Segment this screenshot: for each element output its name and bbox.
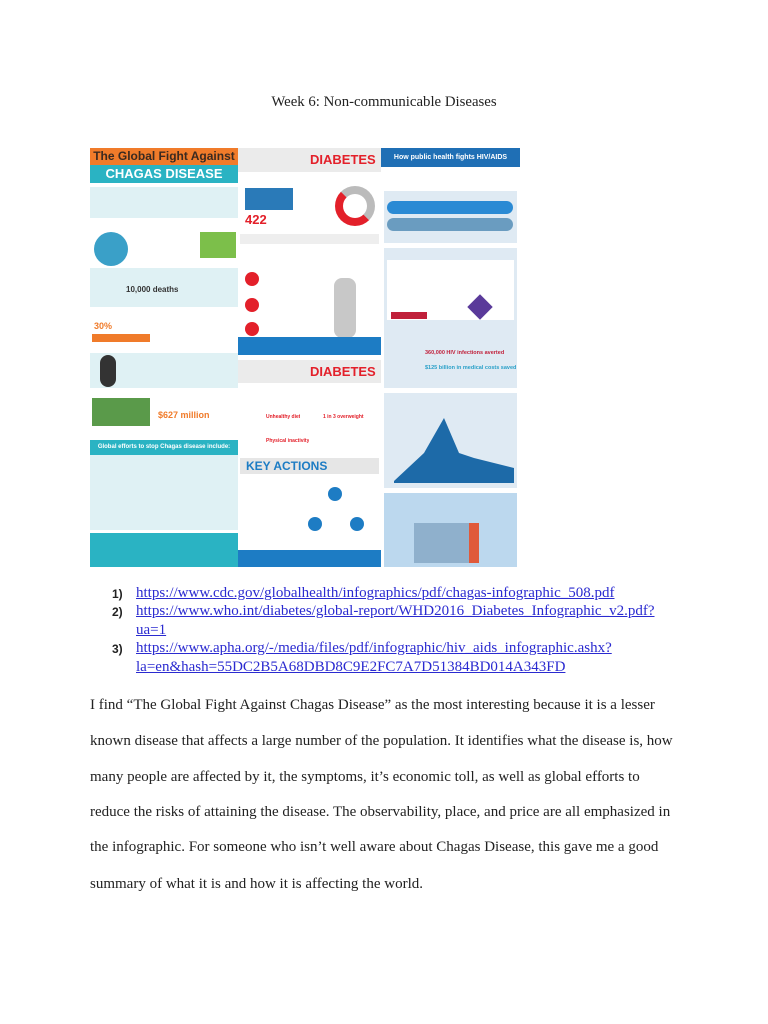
paragraph	[90, 697, 673, 892]
panel: chagas infographic	[90, 148, 238, 567]
text: https://www.apha.org/-/media/files/pdf/infographic/hiv_aids_infographic.ashx?	[136, 640, 612, 656]
heading: How public health fights HIV/AIDS	[394, 154, 507, 161]
block: global efforts	[90, 440, 238, 455]
chart: donut	[335, 186, 375, 226]
panel: hiv/aids: $125 billion in medical costs saved	[425, 365, 516, 371]
panel: chagas infographic: $627 million	[158, 410, 210, 420]
icons: program markers	[391, 312, 427, 319]
text: 2)	[112, 605, 123, 619]
text: https://www.who.int/diabetes/global-report/WHD2016_Diabetes_Infographic_v2.pdf?	[136, 603, 654, 619]
icon: body	[334, 278, 356, 338]
heading: chagas disease	[90, 165, 238, 183]
footer	[90, 533, 238, 567]
paragraph: summary of what it is and how it is affecting the world.	[90, 876, 423, 892]
stat: infections averted: 360,000 HIV infections averted	[425, 350, 504, 356]
heading: chagas disease: CHAGAS DISEASE	[105, 166, 223, 181]
links list	[112, 585, 654, 675]
panel: diabetes 1	[238, 148, 381, 356]
text: risk factors: Unhealthy diet	[266, 414, 300, 420]
footer	[238, 550, 381, 567]
heading: key actions	[240, 458, 379, 474]
panel: diabetes 2: 1 in 3 overweight	[323, 414, 364, 420]
block: cost	[92, 398, 150, 426]
block: deaths	[90, 268, 238, 307]
paragraph: reduce the risks of attaining the disease. The observability, place, and price are all emphasized in	[90, 804, 670, 820]
heading	[381, 148, 520, 167]
block: deaths: 10,000 deaths	[126, 285, 178, 294]
heading: global fight: The Global Fight Against	[93, 149, 235, 163]
stat: 422 million: 422	[245, 212, 267, 227]
footer	[238, 337, 381, 355]
icons: actions	[328, 487, 342, 501]
paragraph: many people are affected by it, the symptoms, it’s economic toll, as well as global efforts to	[90, 769, 640, 785]
heading: diabetes: DIABETES	[310, 152, 376, 167]
panel: diabetes 2	[238, 357, 381, 567]
heading: key actions: KEY ACTIONS	[246, 459, 327, 473]
heading: diabetes 2: DIABETES	[310, 364, 376, 379]
text: ua=1	[136, 622, 166, 638]
block: cause	[90, 187, 238, 218]
block: programs	[384, 191, 517, 243]
text: 3)	[112, 642, 123, 656]
panel: chagas infographic: 30%	[94, 321, 112, 331]
panel: diabetes 2: Physical inactivity	[266, 438, 309, 444]
title: Week 6: Non-communicable Diseases	[271, 94, 497, 110]
block: globe and map	[94, 232, 128, 266]
block: reaches people	[384, 248, 517, 388]
paragraph: I find “The Global Fight Against Chagas Disease” as the most interesting because it is a lesser	[90, 697, 655, 713]
panel: hiv/aids	[381, 148, 520, 567]
text: la=en&hash=55DC2B5A68DBD8C9E2FC7A7D51384BD014A343FD	[136, 659, 565, 675]
text: 1)	[112, 587, 123, 601]
block: global efforts: Global efforts to stop Chagas disease include:	[98, 444, 230, 450]
block: pregnancy	[90, 353, 238, 388]
icons: types	[245, 272, 259, 286]
block: symptoms	[92, 334, 150, 342]
paragraph: the infographic. For someone who isn’t well aware about Chagas Disease, this gave me a good	[90, 839, 658, 855]
paragraph: known disease that affects a large number of the population. It identifies what the disease is, how	[90, 733, 673, 749]
chart: milestones	[384, 393, 517, 488]
block: fight not over	[384, 493, 517, 567]
text: https://www.cdc.gov/globalhealth/infographics/pdf/chagas-infographic_508.pdf	[136, 585, 614, 601]
